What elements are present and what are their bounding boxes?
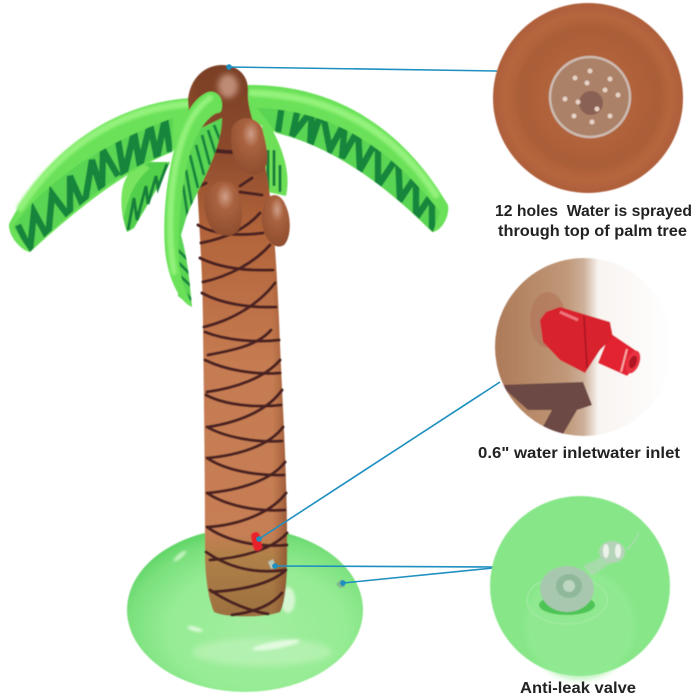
- pointer: valve on trunk: [273, 564, 493, 568]
- caption: sprayer: [495, 203, 692, 240]
- coconut lower left: [204, 182, 242, 236]
- panel: sprayer detail: [493, 3, 683, 193]
- pointer: water inlet: [257, 382, 500, 541]
- caption: water inlet: 0.6" water inletwater inlet: [478, 445, 680, 462]
- pointer lines: [227, 65, 500, 585]
- panel: water inlet detail: [494, 258, 642, 436]
- red water inlet: [250, 531, 263, 552]
- trunk: [188, 65, 287, 616]
- back left leaf: [121, 162, 170, 232]
- coconut right: [262, 195, 290, 247]
- icon: red hose connector: [540, 307, 643, 376]
- caption: anti-leak valve: Anti-leak valve: [520, 680, 636, 697]
- trunk crosshatch lines: [198, 150, 287, 615]
- coconuts: [204, 118, 290, 247]
- icon: transparent valve: [527, 533, 638, 624]
- left leaf: [9, 98, 190, 252]
- small valve on ring: [336, 579, 345, 588]
- coconut upper: [231, 118, 267, 174]
- caption: sprayer: through top of palm tree: [498, 223, 687, 240]
- palm tree: [9, 65, 448, 692]
- inflatable ring base: [127, 528, 363, 692]
- trunk stripes in detail: [500, 382, 592, 434]
- pointer: top sprayer: [227, 65, 497, 71]
- back right leaf: [262, 112, 288, 196]
- caption: sprayer: 12 holes Water is sprayed: [495, 203, 692, 220]
- small valve on trunk: [268, 559, 276, 569]
- right leaf: [247, 85, 448, 232]
- icon: sprayer disc with holes: [550, 57, 630, 137]
- pointer: valve on ring: [341, 568, 493, 585]
- panel: anti-leak valve detail: [490, 496, 670, 680]
- centre leaf: [164, 92, 222, 307]
